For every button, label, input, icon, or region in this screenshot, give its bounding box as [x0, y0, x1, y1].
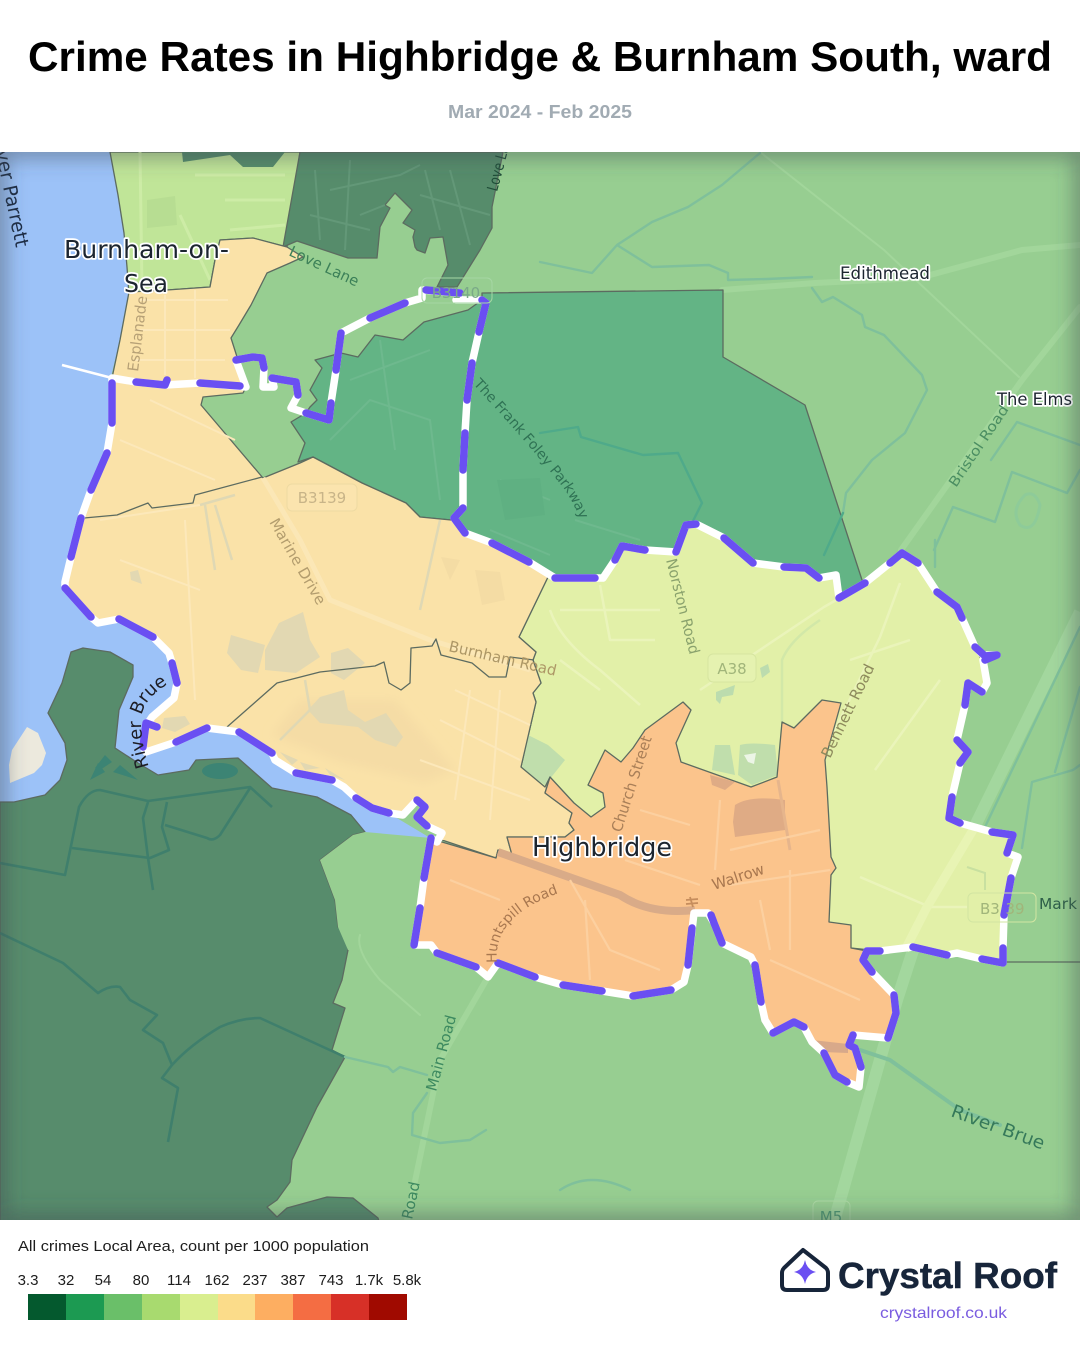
legend colour bar [28, 1294, 407, 1320]
region: top dark strip [182, 152, 285, 167]
legend values: 54 [95, 1272, 111, 1289]
legend values: 114 [167, 1272, 191, 1289]
road and place labels: River Brue [948, 1101, 1048, 1154]
road and place labels: Highbridge [532, 833, 672, 863]
legend values: 1.7k [355, 1272, 384, 1289]
ward boundary: purple dashes [65, 290, 1013, 1082]
road and place labels: River Brue [130, 678, 166, 769]
road and place labels: Bristol Road [946, 403, 1012, 490]
legend title: All crimes Local Area, count per 1000 population [18, 1238, 369, 1255]
ward boundary: white casing [65, 290, 1018, 1087]
region: orange area [414, 700, 896, 1087]
road and place labels: Bennett Road [817, 661, 878, 761]
region: top lime [110, 152, 300, 295]
road shields: A38 [717, 660, 747, 678]
subtitle: date range: Mar 2024 - Feb 2025 [448, 102, 632, 122]
region: south-west dark green [0, 648, 380, 1225]
logo: Crystal Roof [782, 1250, 1058, 1322]
legend values: 5.8k [393, 1272, 422, 1289]
road shields: M5 [820, 1208, 842, 1226]
water: sea and estuary [0, 152, 442, 845]
region: lime ward area [519, 524, 1018, 963]
road shields: B3 [980, 900, 1000, 918]
cream area detail: greens, golf course and streets [84, 290, 534, 820]
road and place labels: Walrow [710, 860, 767, 894]
road and place labels: Love Lane [286, 242, 362, 290]
logo url: crystalroof.co.uk [880, 1305, 1008, 1322]
orange area detail: railway, retail park and streets [450, 775, 860, 1053]
light green patch south of estuary [320, 832, 428, 950]
road and place labels: Burnham-on- [64, 235, 229, 264]
road and place labels: Church Street [608, 733, 656, 834]
region: medium green forest area [291, 290, 863, 598]
legend values: 387 [280, 1272, 306, 1289]
road shields: B3139 [298, 489, 346, 507]
legend [18, 1238, 422, 1320]
road shields: B3140 [432, 284, 480, 302]
icon: house with star [782, 1250, 828, 1290]
legend values: 743 [318, 1272, 344, 1289]
road and place labels: Huntspill Road [486, 884, 557, 962]
road and place labels: The Elms [996, 390, 1072, 410]
road and place labels: Norston Road [662, 557, 703, 656]
road and place labels: Esplanade [124, 295, 151, 372]
pier [62, 365, 112, 378]
road shields: 39 [1005, 900, 1025, 918]
region: top dark green [283, 152, 503, 287]
road and place labels: Marine Drive [266, 515, 330, 608]
road and place labels: Love Lane [483, 128, 517, 193]
legend values: 80 [133, 1272, 149, 1289]
road shields [287, 278, 1036, 1231]
map edge vignette [0, 146, 1080, 1226]
sand island [9, 727, 46, 783]
map background: low-crime countryside [112, 152, 1080, 1220]
logo wordmark: Crystal Roof [838, 1255, 1058, 1296]
road and place labels: Main Road [422, 1013, 460, 1093]
legend values [18, 1272, 422, 1289]
lime area detail: streets and parks [522, 575, 985, 950]
legend values: 162 [204, 1272, 230, 1289]
legend values: 32 [58, 1272, 74, 1289]
road and place labels: Road [398, 1180, 424, 1221]
road and place labels: Burnham Road [447, 637, 558, 680]
region: cream area [65, 238, 574, 858]
road and place labels: Edithmead [840, 264, 930, 284]
legend values: 3.3 [18, 1272, 38, 1289]
road and place labels: The Frank Foley Parkway [476, 377, 588, 516]
road and place labels: Mark [1039, 895, 1077, 913]
title: Crime Rates in Highbridge & Burnham South, ward [28, 33, 1052, 80]
road and place labels: Sea [124, 269, 168, 298]
legend values: 237 [242, 1272, 268, 1289]
countryside drains and roads [345, 152, 1080, 1230]
